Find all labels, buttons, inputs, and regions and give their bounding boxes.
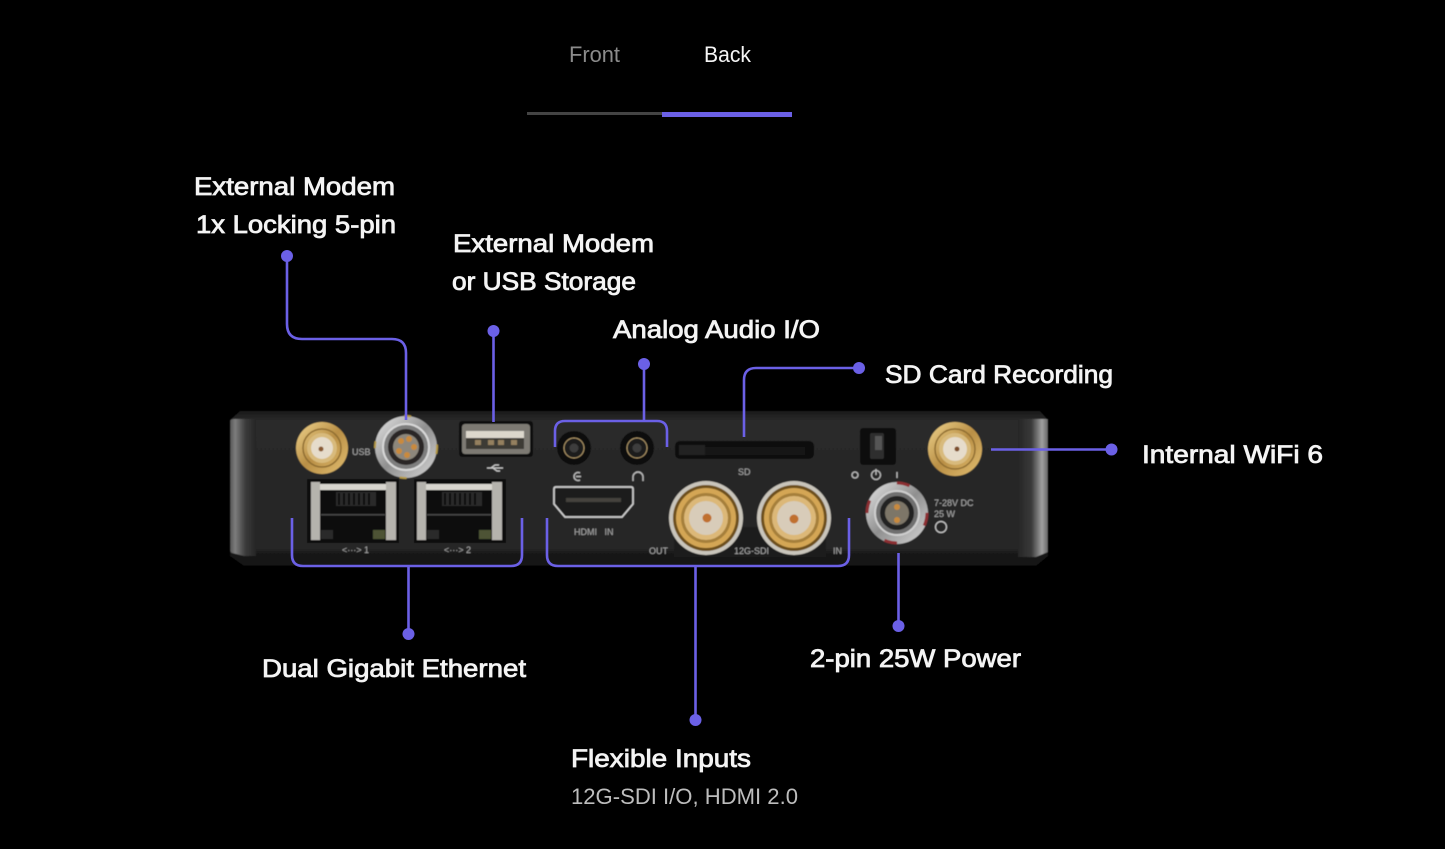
SDI labels (649, 546, 842, 556)
callout: external modem or USB storage: External Modem (453, 230, 654, 258)
ethernet labels (342, 545, 471, 555)
ethernet labels: <···> 2 (444, 545, 471, 555)
callout: external modem locking 5-pin: 1x Locking 5-pin (196, 211, 396, 239)
callout: flexible inputs: Flexible Inputs (571, 745, 751, 773)
left gold antenna connector (296, 422, 348, 474)
SD label: SD (738, 467, 751, 477)
power switch (860, 428, 896, 465)
callout: SD card recording: SD Card Recording (885, 361, 1113, 389)
callout: 2-pin power: 2-pin 25W Power (810, 645, 1021, 673)
power rating text: 7-28V DC (934, 498, 974, 508)
SD card slot (675, 441, 814, 459)
device body (230, 411, 1048, 566)
callout: internal WiFi (991, 441, 1323, 469)
ethernet port 1 (307, 479, 399, 543)
HDMI IN label: HDMI IN (574, 527, 614, 537)
ethernet labels: <···> 1 (342, 545, 369, 555)
callout: 2-pin power (810, 553, 1021, 673)
callout: analog audio (555, 316, 820, 447)
SDI labels: 12G-SDI (734, 546, 769, 556)
2-pin power connector (866, 482, 928, 544)
right chrome edge (1018, 419, 1048, 557)
callout: external modem locking 5-pin (194, 173, 406, 420)
tabs: Front / Back: Back (704, 42, 752, 67)
audio icons (574, 472, 643, 481)
power rating text: 25 W (934, 509, 956, 519)
BNC IN connector (757, 481, 831, 555)
callout: flexible inputs: 12G-SDI I/O, HDMI 2.0 (571, 784, 798, 809)
power switch marks (852, 469, 897, 480)
callout: internal WiFi: Internal WiFi 6 (1142, 441, 1323, 469)
SDI labels: IN (833, 546, 842, 556)
callout: external modem or USB storage (452, 230, 654, 422)
callout: SD card recording (744, 361, 1113, 437)
callout: flexible inputs (547, 518, 849, 809)
ethernet port 2 (414, 479, 506, 543)
audio input jack (557, 431, 591, 465)
HDMI port (554, 487, 633, 517)
device: back panel (230, 411, 1048, 566)
callout: external modem locking 5-pin: External Modem (194, 173, 395, 201)
SDI labels: OUT (649, 546, 668, 556)
5-pin locking connector (375, 416, 437, 478)
right gold antenna connector (928, 422, 982, 476)
callout: external modem or USB storage: or USB Storage (452, 268, 636, 296)
callout: dual gigabit ethernet: Dual Gigabit Ethernet (262, 655, 526, 683)
power rating text (934, 498, 974, 532)
tabs: Front / Back (527, 42, 792, 117)
USB symbol (487, 465, 503, 471)
tabs: Front / Back: Front (569, 42, 620, 67)
callout: analog audio: Analog Audio I/O (613, 316, 820, 344)
USB-A port (459, 421, 533, 457)
BNC base plate (674, 527, 826, 557)
callout: dual gigabit ethernet (262, 518, 526, 683)
USB silkscreen label: USB (352, 447, 371, 457)
BNC OUT connector (669, 481, 743, 555)
headphone jack (620, 431, 654, 465)
left chrome edge (230, 419, 256, 556)
